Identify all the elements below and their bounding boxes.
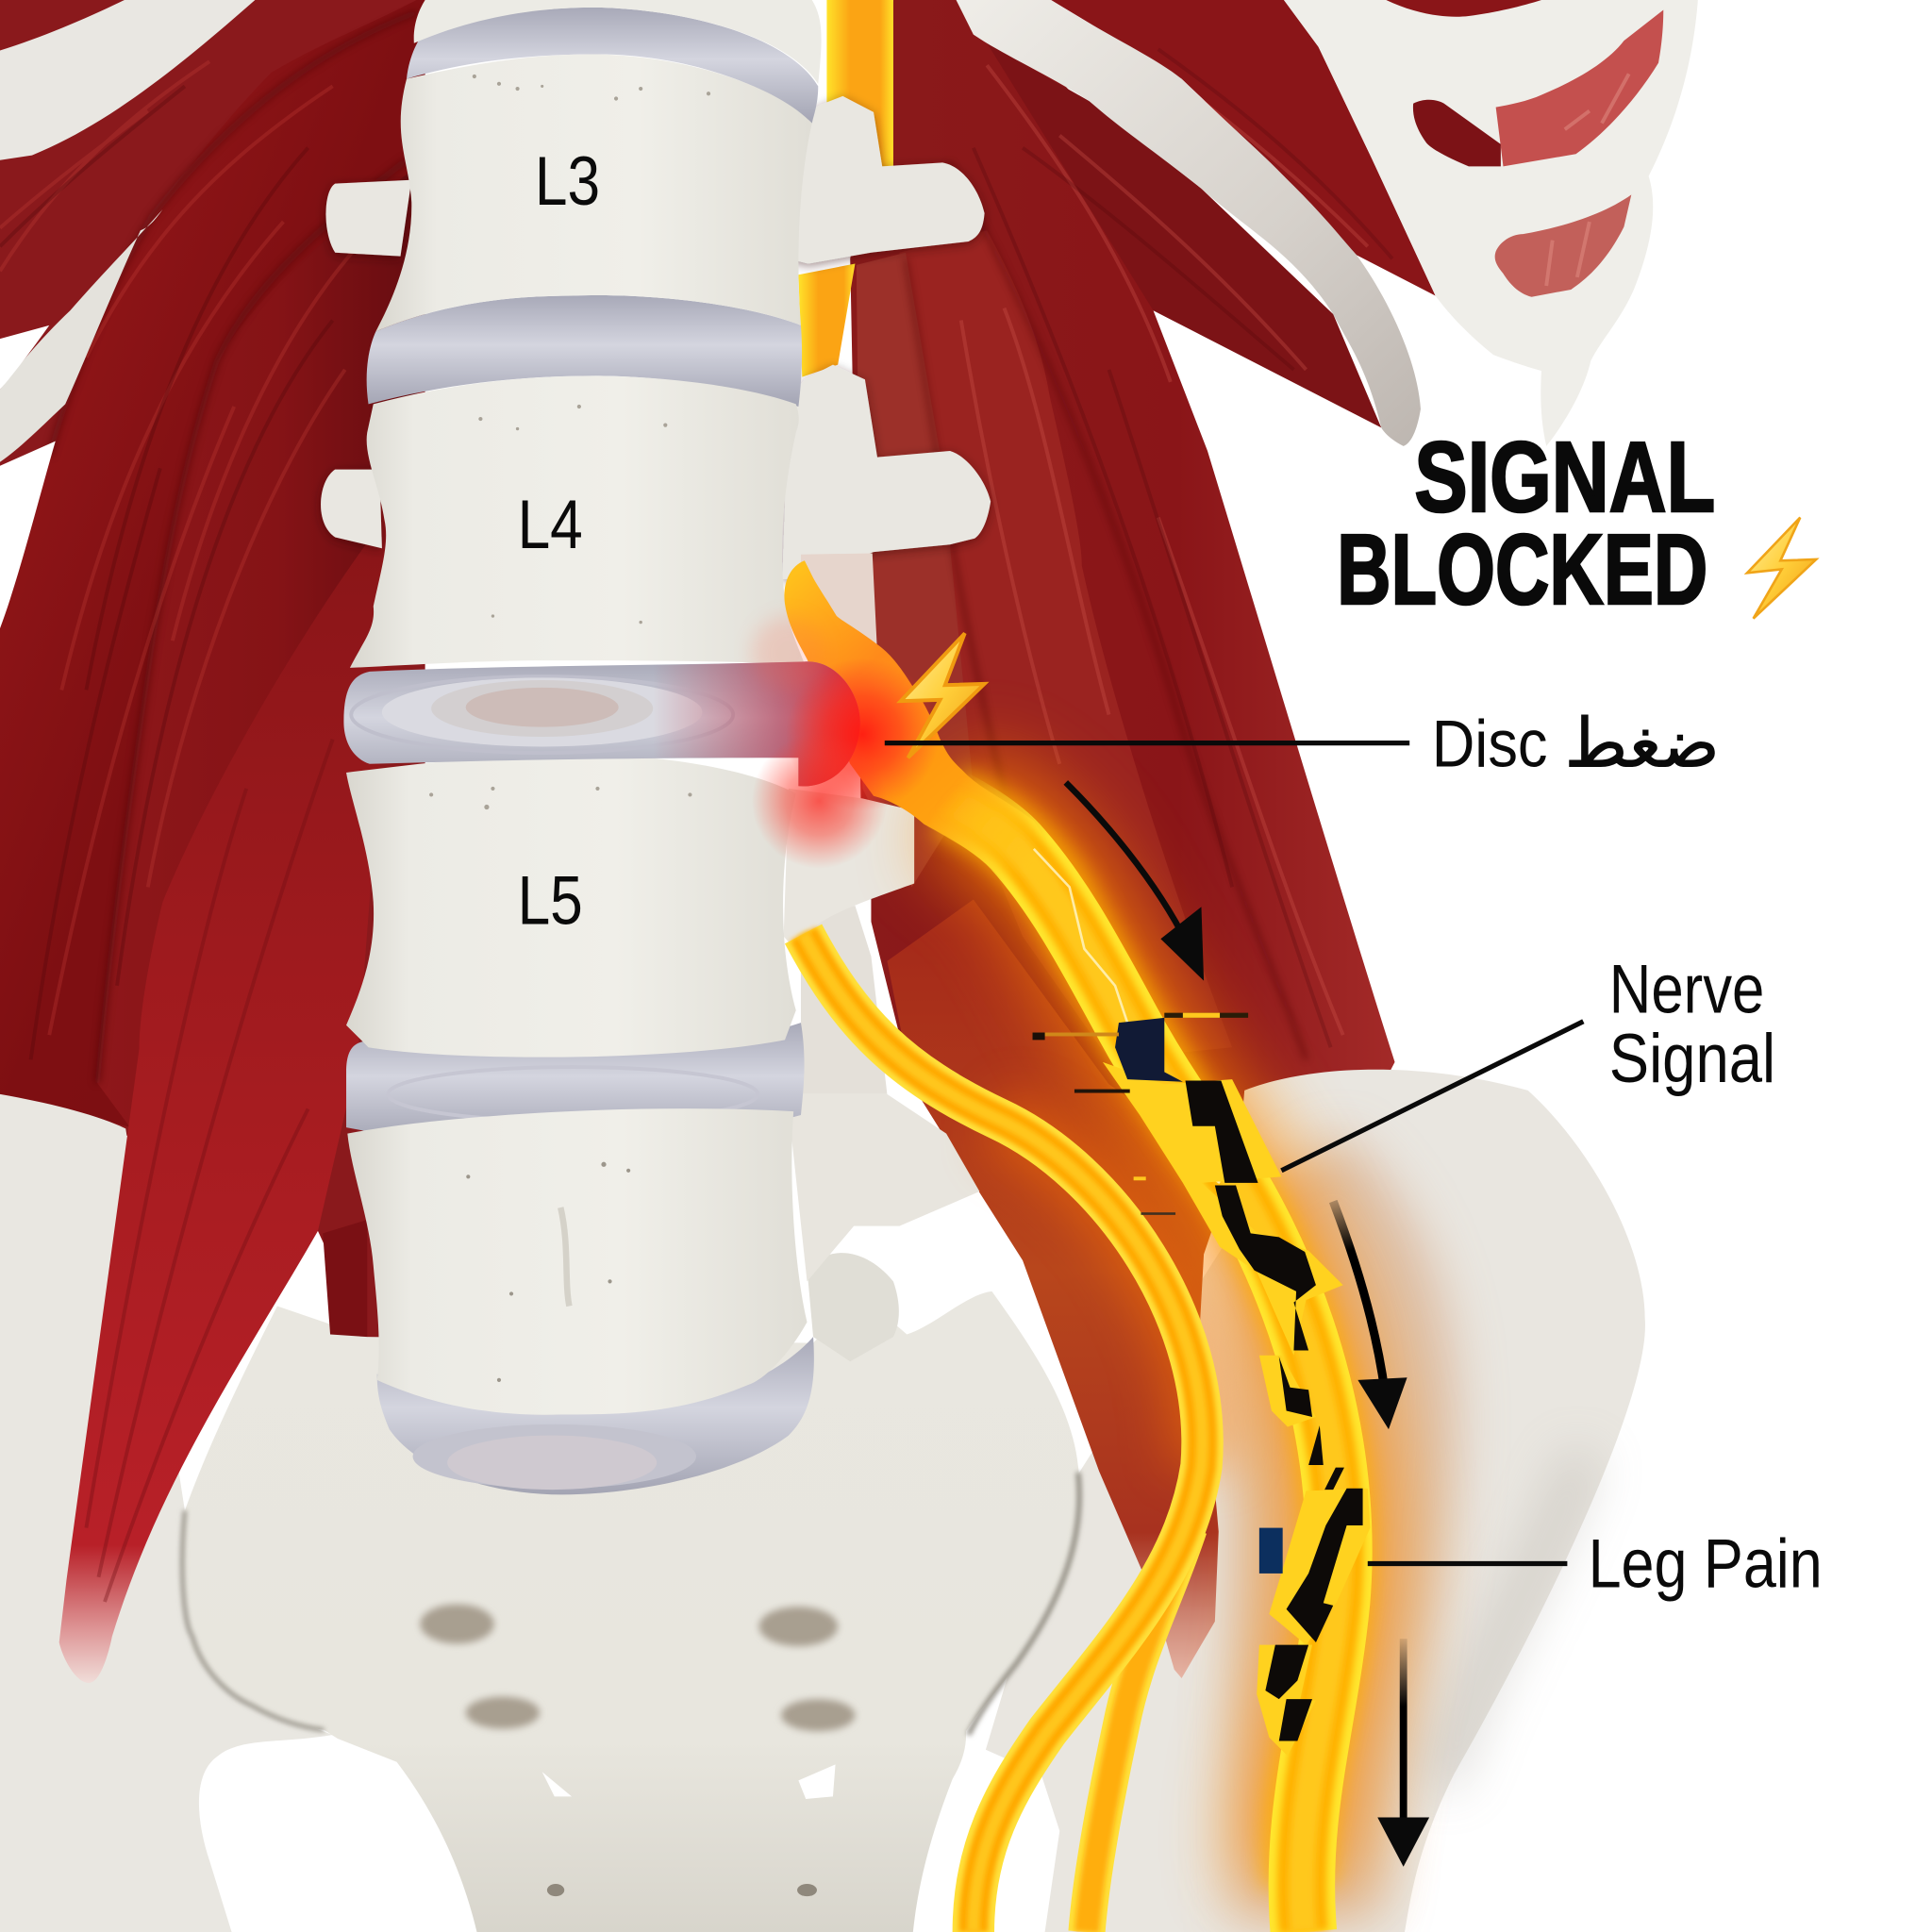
muscle: right back muscles: [850, 0, 1436, 1232]
icon: lightning bolt at compression: [901, 633, 985, 758]
label: disc compression: Disc: [1432, 706, 1547, 780]
muscle: lower psoas overlapping pelvis: [887, 899, 1232, 1678]
glitch: blocked nerve signal fragments: [1033, 1013, 1370, 1756]
leader line: nerve signal: [1281, 1022, 1583, 1171]
vertebra: L4: [350, 375, 805, 668]
nerve: spinal segments at top: [798, 0, 893, 377]
label: disc compression: ضغط: [1565, 703, 1720, 782]
label: L3: L3: [535, 143, 600, 220]
label: L4: L4: [518, 487, 583, 563]
nerve: main sciatic: [942, 797, 1339, 1932]
icon: lightning bolt by title: [1747, 518, 1816, 619]
label: nerve signal: Nerve: [1609, 952, 1764, 1028]
label: leg pain: Leg Pain: [1589, 1525, 1823, 1602]
muscle: left lower psoas: [59, 370, 425, 1683]
title: Signal Blocked: BLOCKED: [1337, 514, 1707, 625]
leader line: leg pain: [1368, 1561, 1567, 1565]
bone: right iliac crest: [986, 1070, 1645, 1932]
nerve: second branch: [804, 934, 1203, 1932]
label: nerve signal: [1609, 952, 1775, 1097]
disc: L5 lower: [346, 1023, 805, 1142]
vertebra: lower lumbar, unlabeled: [347, 1108, 808, 1415]
bone: left iliac: [0, 1094, 333, 1932]
vertebra: L3: [375, 54, 812, 331]
bone: left transverse processes and right processes: [321, 96, 991, 579]
arrow: second signal arrow: [1333, 1201, 1407, 1429]
white electric crackle on nerve: [1034, 849, 1220, 1183]
bone: L5 process and lower column: [784, 789, 979, 1281]
label: L5: L5: [518, 863, 583, 940]
vertebra top partial: [414, 0, 822, 84]
red pain glow at compression: [752, 616, 939, 869]
nerve glow on muscle and pelvis: [949, 801, 1339, 1885]
leader line: disc compression: [885, 741, 1409, 745]
arrow: third signal arrow: [1377, 1639, 1429, 1867]
label: nerve signal: Signal: [1609, 1021, 1775, 1097]
title: Signal Blocked: [1337, 422, 1715, 625]
disc: top: [407, 8, 818, 124]
bone: rib band: [957, 0, 1421, 446]
label: disc compression: [1432, 703, 1720, 782]
bones: rib cage top right: [1284, 0, 1698, 446]
bone: column behind nerve: [801, 553, 877, 653]
arrow: first signal arrow: [1066, 782, 1204, 981]
sacral foramina: [420, 1605, 855, 1896]
title: Signal Blocked: SIGNAL: [1414, 422, 1715, 533]
bone: sacrum and pelvis: [182, 1253, 1081, 1932]
herniated disc: L4-L5 with compression: [343, 661, 860, 787]
bones: upper left rib strips: [0, 0, 255, 628]
vertebra: L5: [346, 754, 796, 1058]
muscle: left back muscles: [0, 0, 425, 1343]
disc: lumbosacral: [377, 1337, 814, 1494]
nerve: compressed upper segment: [784, 560, 1059, 906]
disc: L3-L4: [367, 295, 802, 407]
